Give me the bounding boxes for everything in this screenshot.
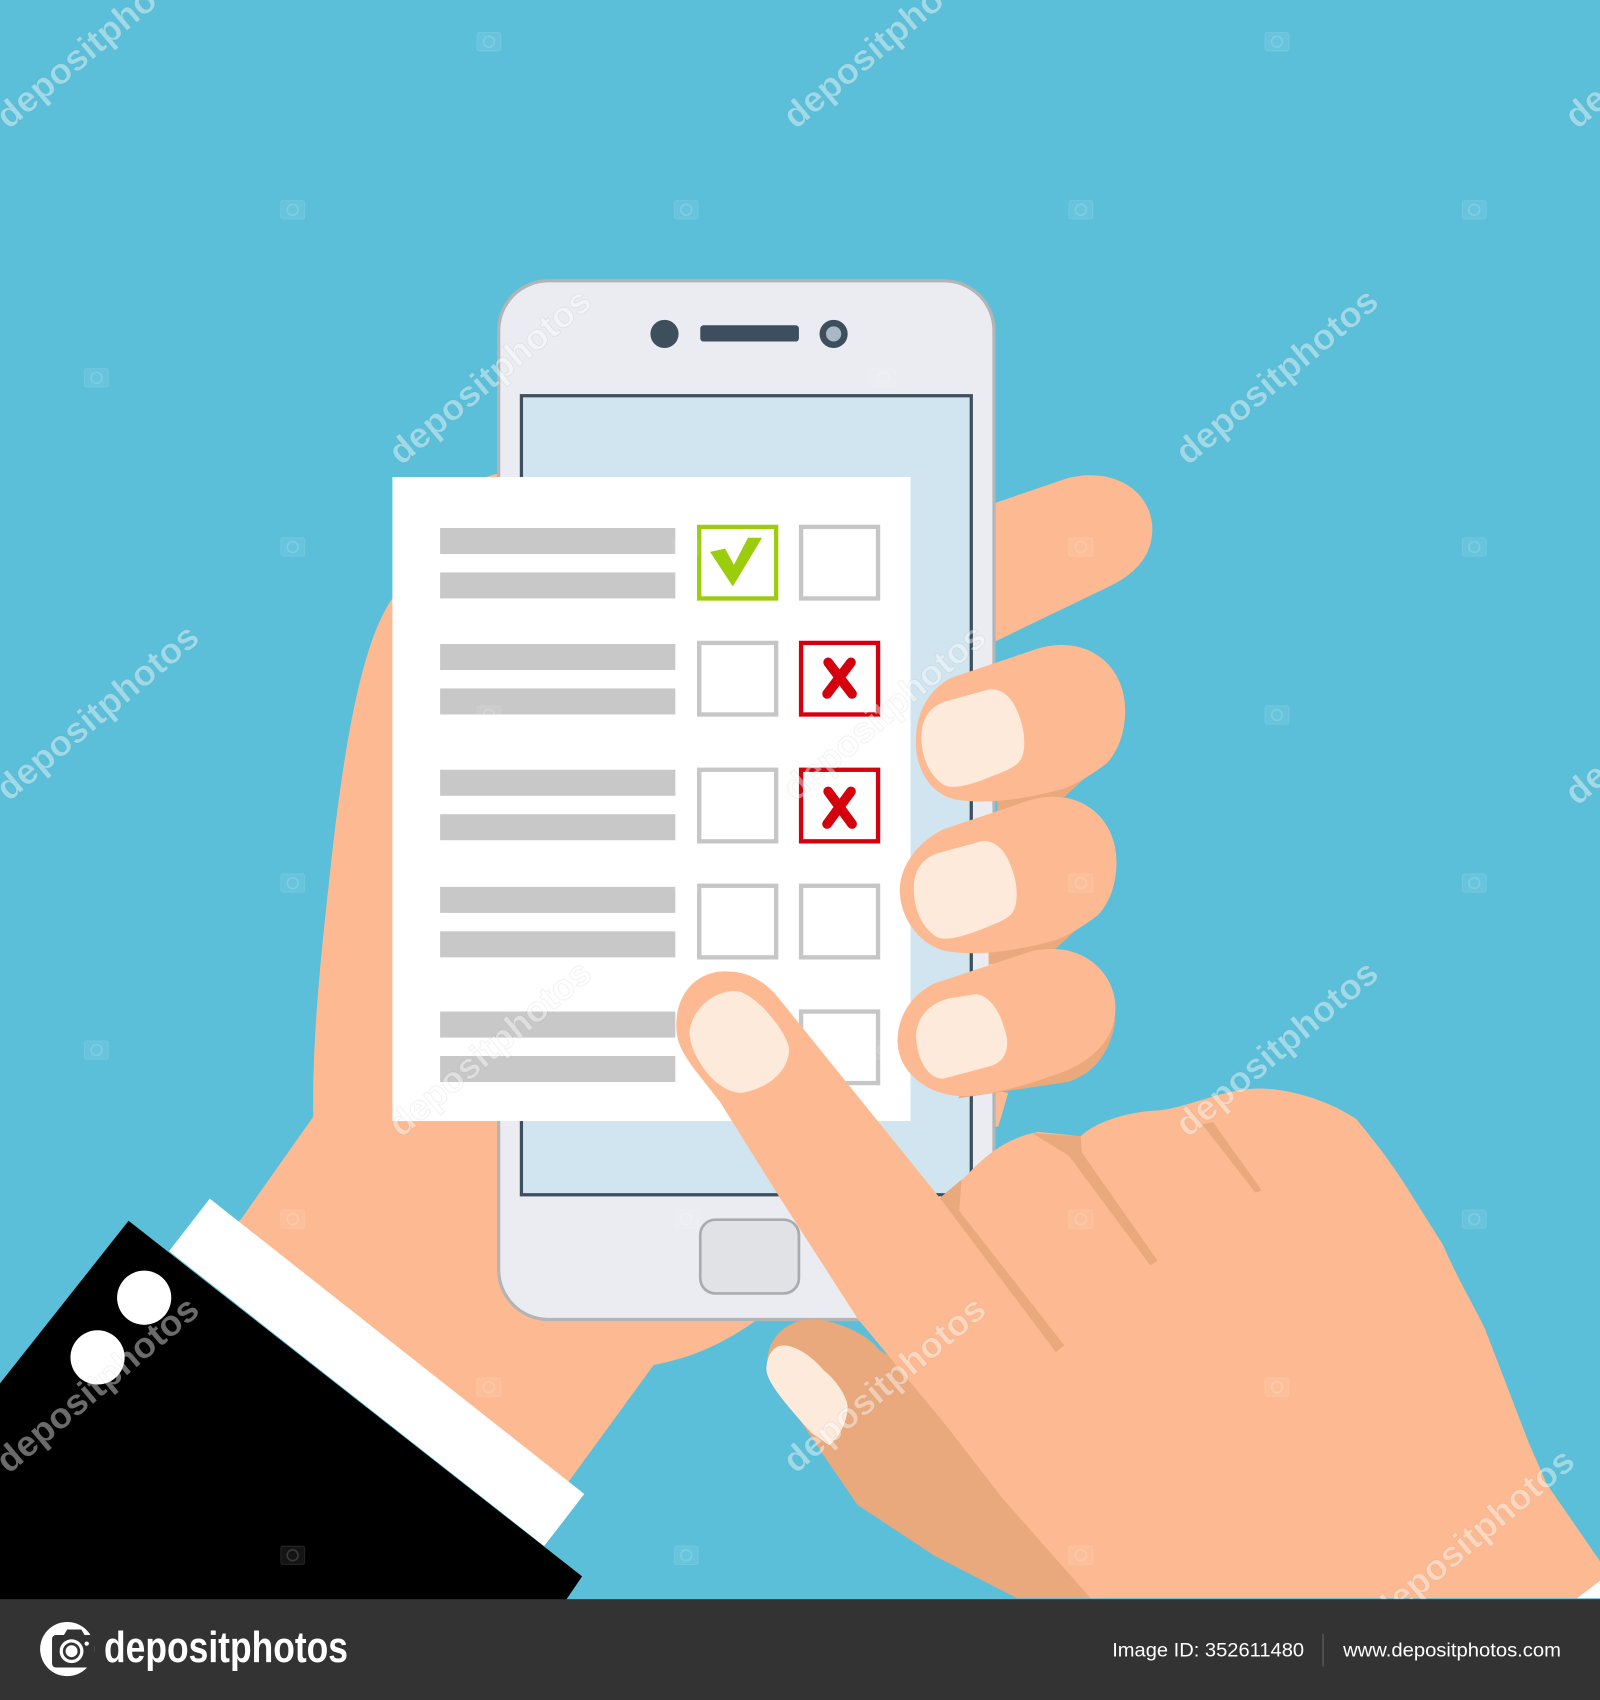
logo wordmark: depositphotos [104, 1624, 348, 1672]
row 4 second empty box [801, 886, 878, 957]
left hand palm [217, 542, 867, 1502]
small finger piece below phone edge [992, 1090, 1008, 1128]
phone screen [521, 396, 971, 1195]
row 4 text [440, 887, 675, 957]
earpiece speaker [700, 325, 799, 342]
row 3 text [440, 770, 675, 840]
pointing hand [676, 971, 1600, 1598]
logo camera icon [40, 1622, 94, 1676]
row 1 checked box [699, 527, 776, 598]
wrist corner [1577, 1581, 1600, 1598]
row 4 empty box [699, 886, 776, 957]
knuckle crease 2 [1032, 1133, 1158, 1265]
paper [392, 477, 911, 1121]
holding fingers [898, 645, 1125, 1098]
watermarks: depositphotos [381, 952, 599, 1145]
checklist sheet [392, 477, 911, 1121]
hand and index finger [676, 971, 1600, 1598]
image id: Image ID: 352611480 [1112, 1640, 1304, 1662]
front camera [650, 320, 679, 348]
suit sleeve [0, 1221, 582, 1600]
footer bar [0, 1599, 1600, 1700]
sensor [820, 320, 848, 348]
watermarks: depositphotos [775, 1288, 993, 1481]
camera watermark icons [85, 33, 1486, 1564]
watermarks: depositphotos [775, 616, 993, 808]
thumb peek above sheet [482, 474, 501, 478]
shirt cuff [169, 1199, 584, 1546]
row 3 empty box [699, 770, 776, 841]
index nail [689, 991, 789, 1093]
website url: www.depositphotos.com [1342, 1640, 1561, 1662]
footer divider [1322, 1634, 1324, 1666]
row 5 text [440, 1012, 675, 1082]
thumb [767, 1319, 1095, 1598]
knuckle crease 1 [940, 1180, 1064, 1352]
row 3 red cross box [801, 770, 878, 841]
knuckle crease 3 [1202, 1122, 1262, 1193]
footer logo [40, 1622, 348, 1676]
watermarks: depositphotos [1364, 1440, 1582, 1632]
thumb nail [766, 1345, 848, 1445]
smartphone [499, 281, 994, 1319]
row 5 empty box [801, 1012, 878, 1083]
cuff button 1 [117, 1271, 171, 1325]
row 2 empty box [699, 643, 776, 714]
back finger [976, 475, 1152, 648]
finger 3 [898, 949, 1115, 1098]
phone body [499, 281, 994, 1319]
row 2 red cross box [801, 643, 878, 714]
watermarks: depositphotos [381, 280, 599, 472]
watermarks: depositphotos [1168, 280, 1386, 472]
row 1 text [440, 528, 675, 598]
row 1 empty box [801, 527, 878, 598]
home button [700, 1220, 799, 1293]
finger 2 [900, 797, 1117, 965]
row 2 text [440, 644, 675, 714]
cuff button 2 [70, 1330, 125, 1385]
watermarks: depositphotos [1168, 952, 1386, 1145]
finger 1 [916, 645, 1125, 813]
